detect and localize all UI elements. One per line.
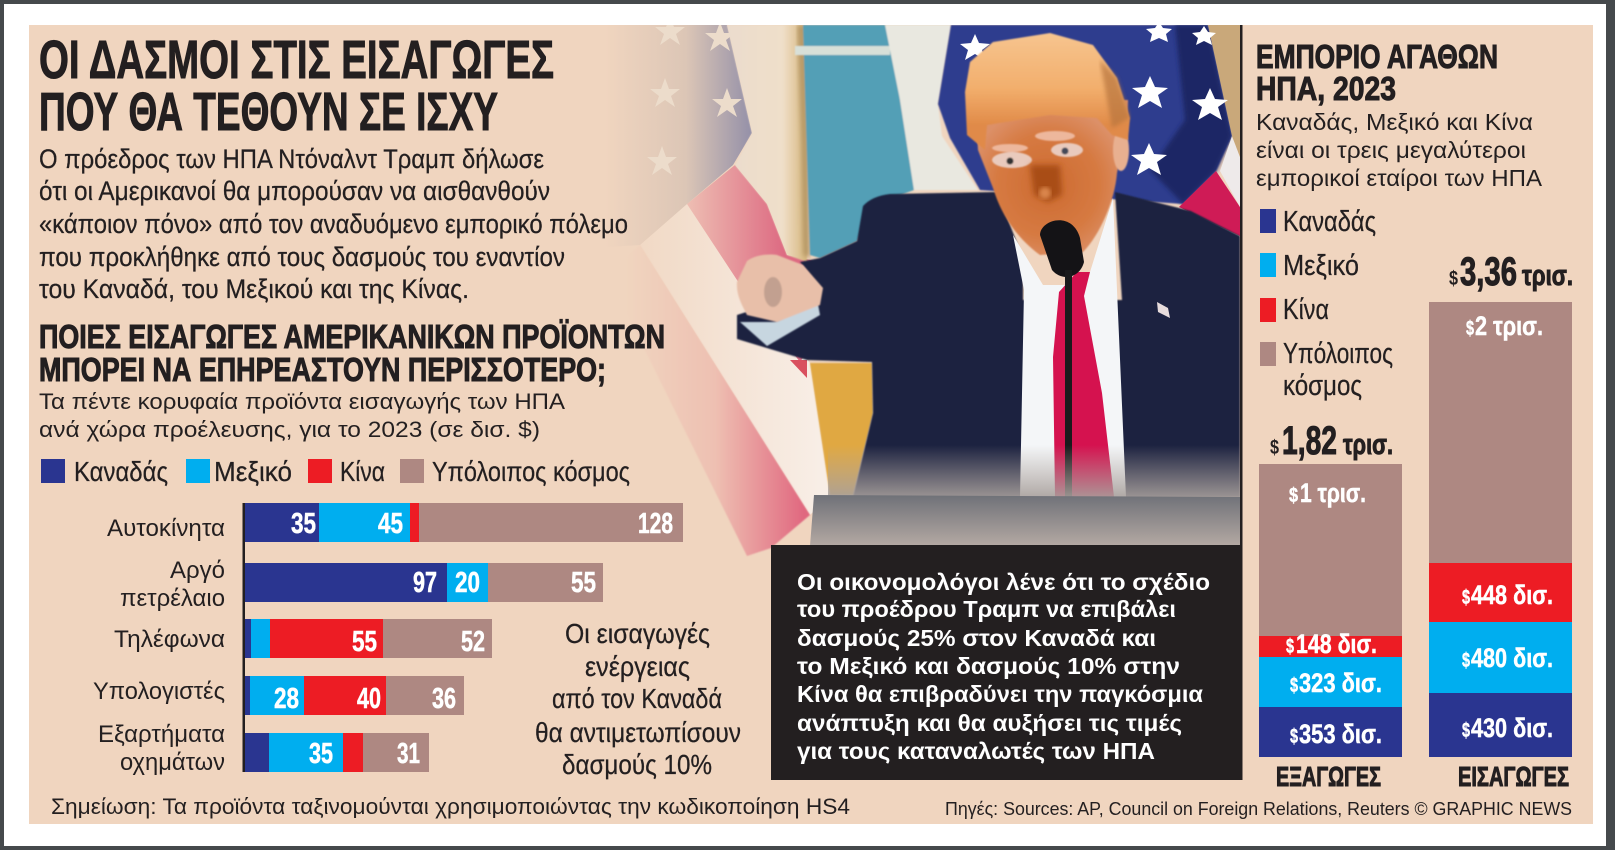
row: crude oil: 97 <box>413 567 437 599</box>
right panel heading: ΗΠΑ, 2023 <box>1256 70 1396 107</box>
right panel heading: ΕΜΠΟΡΙΟ ΑΓΑΘΩΝ <box>1256 38 1498 75</box>
head <box>965 33 1130 255</box>
row: cars: Αυτοκίνητα <box>107 515 225 542</box>
right panel description: εμπορικοί εταίροι των ΗΠΑ <box>1256 165 1543 191</box>
callout: black economists box: το Μεξικό και δασμούς 10% στην <box>797 653 1180 679</box>
bar chart: top imports <box>93 503 683 776</box>
callout: energy imports note: ενέργειας <box>585 651 690 682</box>
US flag behind head <box>938 22 1240 236</box>
right panel description: είναι οι τρεις μεγαλύτεροι <box>1256 137 1526 163</box>
label: rest of world imports: 2 τρισ. <box>1475 311 1543 341</box>
legend: goods trade: Κίνα <box>1283 294 1329 326</box>
legend: bar chart <box>41 456 630 487</box>
intro paragraph: ότι οι Αμερικανοί θα μπορούσαν να αισθανθούν <box>39 176 550 206</box>
row: cars: 45 <box>378 508 403 540</box>
imports total <box>1449 250 1573 294</box>
label: Mexico imports: $ <box>1462 650 1470 672</box>
legend: bar chart: Μεξικό <box>214 456 292 487</box>
legend: goods trade: Μεξικό <box>1283 250 1359 282</box>
right panel description <box>1256 109 1543 191</box>
flag stripes faded left <box>638 25 828 556</box>
label: rest of world exports: 1 τρισ. <box>1300 478 1366 508</box>
label: China exports: $ <box>1286 636 1294 658</box>
row: cars: 128 <box>638 508 673 540</box>
right panel heading <box>1256 38 1498 107</box>
callout: black economists box <box>771 545 1242 780</box>
background curtains <box>727 25 978 495</box>
stacked bar: imports: ΕΙΣΑΓΩΓΕΣ <box>1458 761 1569 792</box>
exports total: τρισ. <box>1343 429 1393 461</box>
callout: black economists box: του προέδρου Τραμπ να επιβάλει <box>797 596 1176 622</box>
axis <box>242 503 245 772</box>
row: phones <box>114 619 492 658</box>
subheading: ΠΟΙΕΣ ΕΙΣΑΓΩΓΕΣ ΑΜΕΡΙΚΑΝΙΚΩΝ ΠΡΟΪΟΝΤΩΝ <box>39 318 665 355</box>
label: Canada imports: $ <box>1462 720 1470 742</box>
tie <box>1053 272 1114 497</box>
divider line right of photo <box>1240 25 1242 780</box>
row: cars: 35 <box>291 508 316 540</box>
chart description: Τα πέντε κορυφαία προϊόντα εισαγωγής των ΗΠΑ <box>39 389 565 414</box>
hand and cuff <box>737 255 823 346</box>
shirt <box>1013 198 1126 497</box>
label: rest of world imports: $ <box>1466 318 1474 340</box>
label: Canada exports: 353 δισ. <box>1299 719 1382 749</box>
callout: black economists box: Κίνα θα επιβραδύνει την παγκόσμια <box>797 681 1203 707</box>
intro paragraph <box>39 144 628 304</box>
stacked bar: exports: ΕΞΑΓΩΓΕΣ <box>1276 761 1381 792</box>
row: computers <box>93 676 464 715</box>
callout: energy imports note: από τον Καναδά <box>552 683 722 714</box>
legend: bar chart: Υπόλοιπος κόσμος <box>432 456 630 487</box>
label: China imports: $ <box>1462 587 1470 609</box>
callout: energy imports note: θα αντιμετωπίσουν <box>535 717 741 748</box>
exports total: $ <box>1270 437 1279 459</box>
row: crude oil: Αργό <box>170 557 225 584</box>
callout: black economists box: δασμούς 25% στον Καναδά και <box>797 625 1156 651</box>
row: crude oil: πετρέλαιο <box>120 585 225 612</box>
legend: bar chart: Καναδάς <box>74 456 168 487</box>
chart description: ανά χώρα προέλευσης, για το 2023 (σε δισ. $) <box>39 417 540 442</box>
callout: energy imports note: Οι εισαγωγές <box>565 618 710 649</box>
fade at lectern <box>828 445 1240 497</box>
row: vehicle parts: 31 <box>397 738 420 770</box>
row: vehicle parts: Εξαρτήματα <box>98 721 225 748</box>
microphone <box>1040 220 1084 498</box>
row: computers: Υπολογιστές <box>93 678 225 705</box>
exports total: 1,82 <box>1282 419 1337 463</box>
callout: black economists box: ανάπτυξη και θα αυξήσει τις τιμές <box>797 710 1182 736</box>
row: crude oil: 55 <box>571 567 596 599</box>
label: China imports: 448 δισ. <box>1471 580 1553 610</box>
callout: black economists box: Οι οικονομολόγοι λένε ότι το σχέδιο <box>797 569 1210 595</box>
row: crude oil <box>120 557 603 612</box>
callout: energy imports note: δασμούς 10% <box>562 749 712 780</box>
row: vehicle parts: οχημάτων <box>120 749 225 776</box>
label: rest of world exports <box>1289 478 1366 508</box>
legend: goods trade: κόσμος <box>1283 370 1362 402</box>
intro paragraph: που προκλήθηκε από τους δασμούς του εναντίον <box>39 242 565 272</box>
row: cars <box>107 503 683 542</box>
lapel pin <box>1157 302 1170 318</box>
row: phones: 55 <box>352 626 377 658</box>
label: Mexico exports: 323 δισ. <box>1299 668 1382 698</box>
imports total: $ <box>1449 268 1458 290</box>
legend: goods trade <box>1260 206 1393 402</box>
row: computers: 28 <box>274 683 299 715</box>
subheading <box>39 318 665 388</box>
legend: goods trade: Υπόλοιπος <box>1283 338 1393 370</box>
intro paragraph: Ο πρόεδρος των ΗΠΑ Ντόναλντ Τραμπ δήλωσε <box>39 144 544 174</box>
intro paragraph: του Καναδά, του Μεξικού και της Κίνας. <box>39 274 469 304</box>
row: crude oil: 20 <box>455 567 480 599</box>
imports total: τρισ. <box>1522 260 1573 292</box>
stacked bar: exports <box>1259 419 1402 792</box>
label: Mexico imports: 480 δισ. <box>1471 643 1553 673</box>
legend: goods trade: Καναδάς <box>1283 206 1376 238</box>
legend: bar chart: Κίνα <box>340 456 385 487</box>
label: Mexico exports: $ <box>1290 675 1298 697</box>
imports total: 3,36 <box>1460 250 1517 294</box>
label: Canada imports: 430 δισ. <box>1471 713 1553 743</box>
right panel description: Καναδάς, Μεξικό και Κίνα <box>1256 109 1533 135</box>
row: computers: 40 <box>357 683 381 715</box>
source credit: Πηγές: Sources: AP, Council on Foreign Relations, Reuters © GRAPHIC NEWS <box>945 798 1572 819</box>
exports total <box>1270 419 1393 463</box>
stacked bar: imports <box>1429 250 1573 792</box>
intro paragraph: «κάποιον πόνο» από τον αναδυόμενο εμπορικό πόλεμο <box>39 209 628 239</box>
row: vehicle parts <box>98 721 429 776</box>
subheading: ΜΠΟΡΕΙ ΝΑ ΕΠΗΡΕΑΣΤΟΥΝ ΠΕΡΙΣΣΟΤΕΡΟ; <box>39 351 606 388</box>
main title: ΠΟΥ ΘΑ ΤΕΘΟΥΝ ΣΕ ΙΣΧΥ <box>39 82 498 142</box>
row: computers: 36 <box>432 683 456 715</box>
row: phones: 52 <box>461 626 485 658</box>
chart description <box>39 389 565 442</box>
podium <box>810 495 1240 546</box>
callout: energy imports note <box>535 618 741 780</box>
main title: ΟΙ ΔΑΣΜΟΙ ΣΤΙΣ ΕΙΣΑΓΩΓΕΣ <box>39 30 554 90</box>
suit <box>737 192 1240 497</box>
photo: president at podium with flags <box>638 25 1240 556</box>
row: phones: Τηλέφωνα <box>114 626 225 653</box>
label: rest of world exports: $ <box>1289 485 1298 507</box>
label: China exports: 148 δισ. <box>1296 629 1377 659</box>
footnote: Σημείωση: Τα προϊόντα ταξινομούνται χρησιμοποιώντας την κωδικοποίηση HS4 <box>51 794 850 819</box>
main title <box>39 30 554 142</box>
callout: black economists box: για τους καταναλωτές των ΗΠΑ <box>797 738 1155 764</box>
label: Canada exports: $ <box>1290 726 1298 748</box>
row: vehicle parts: 35 <box>309 738 333 770</box>
